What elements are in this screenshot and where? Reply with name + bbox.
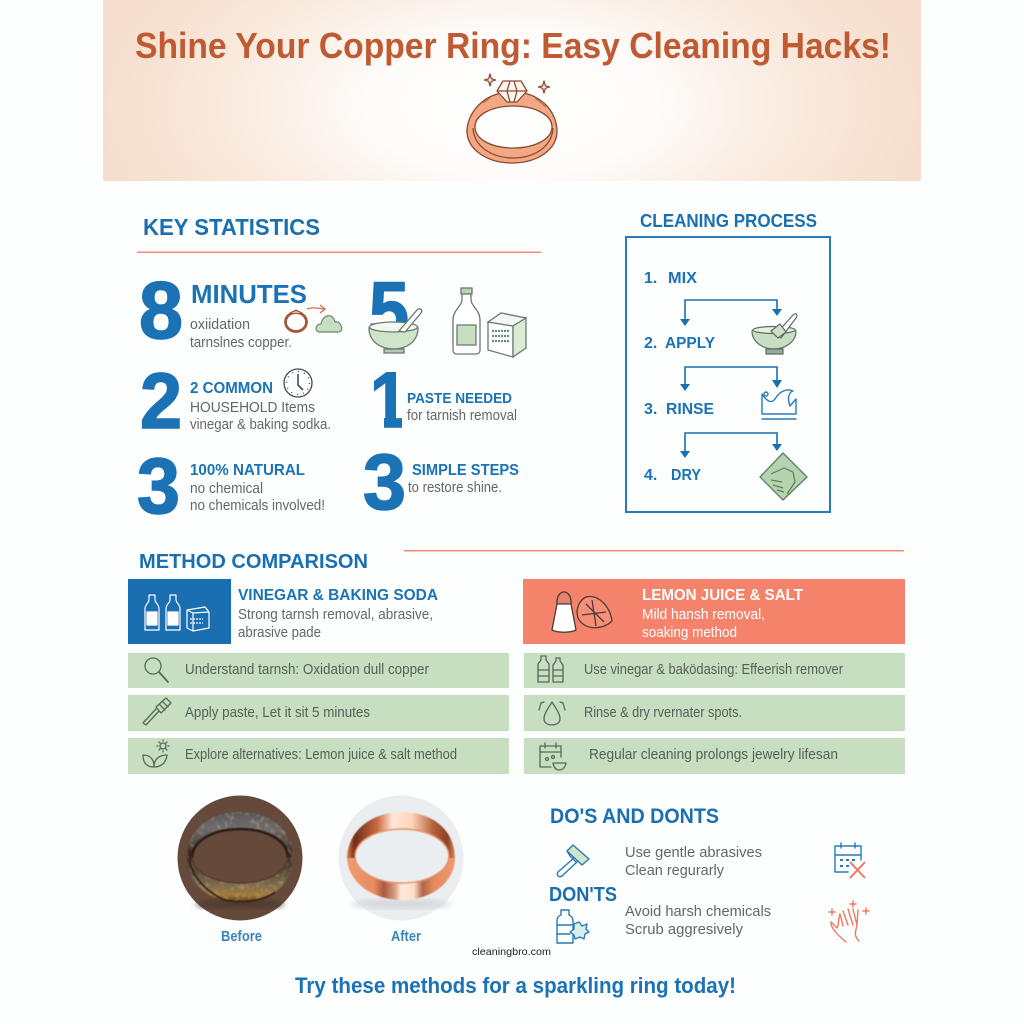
step 2 apply: 2. xyxy=(644,335,657,352)
row: explore alternatives xyxy=(128,738,509,774)
icon: clock xyxy=(284,369,312,397)
heading: don'ts: DON'TS xyxy=(549,884,617,906)
icon: roller brush xyxy=(557,845,589,877)
panel: do's and don'ts xyxy=(549,805,869,943)
stat: 8 minutes: tarnslnes copper. xyxy=(190,335,292,351)
icon: magnifier xyxy=(145,658,168,682)
row: understand tarnish xyxy=(128,653,509,688)
panel: lemon juice and salt: soaking method xyxy=(642,625,737,641)
label: before: Before xyxy=(221,929,262,945)
step 4 dry xyxy=(644,467,701,484)
stat: 3 simple steps: to restore shine. xyxy=(408,480,502,496)
step 3 rinse: 3. xyxy=(644,401,657,418)
icon: brush xyxy=(143,698,171,725)
panel: lemon juice and salt xyxy=(523,579,905,644)
icon: water wave xyxy=(762,390,796,419)
stat: 8 minutes: oxiidation xyxy=(190,317,250,333)
row: apply paste: Apply paste, Let it sit 5 minutes xyxy=(185,704,370,721)
stat: 2 common household items: 2 COMMON xyxy=(190,380,273,397)
step 1 mix: MIX xyxy=(668,270,697,287)
panel: header banner xyxy=(103,0,921,181)
row: rinse and dry xyxy=(524,695,905,731)
heading: do's and donts: DO'S AND DONTS xyxy=(550,805,719,828)
step 4 dry: DRY xyxy=(671,467,701,484)
stat: 8 minutes xyxy=(139,266,342,356)
panel: lemon juice and salt: LEMON JUICE & SALT xyxy=(642,587,803,604)
row: use vinegar xyxy=(524,653,905,688)
row: regular cleaning: Regular cleaning prolongs jewelry lifesan xyxy=(589,746,838,763)
panel: vinegar and baking soda: abrasive pade xyxy=(238,625,321,641)
heading: method comparison: METHOD COMPARISON xyxy=(139,550,368,573)
photo: shiny ring after xyxy=(338,796,464,920)
stat: 5 with bowl, bottle and box: 5 xyxy=(369,266,409,356)
icon: scrubbing hand with sparkles xyxy=(829,901,869,942)
arrows: rinse to dry xyxy=(680,433,782,458)
panel: vinegar and baking soda: Strong tarnsh removal, abrasive, xyxy=(238,607,433,623)
icon: ring to cloud xyxy=(286,305,342,332)
row: understand tarnish: Understand tarnsh: Oxidation dull copper xyxy=(185,661,429,678)
icon: calendar with cross xyxy=(835,843,865,878)
stat: 1 paste needed xyxy=(374,372,516,428)
icon: copper ring with gem xyxy=(467,74,557,163)
panel: vinegar and baking soda xyxy=(128,579,438,644)
stat: 2 common household items: 2 xyxy=(140,356,182,445)
icon: bottles and box xyxy=(145,595,209,631)
panel: key statistics xyxy=(138,280,528,515)
icon: vinegar bottle xyxy=(453,288,480,354)
icon: baking soda box xyxy=(488,313,526,357)
step 1 mix xyxy=(644,270,697,287)
panel: lemon juice and salt: Mild hansh removal, xyxy=(642,607,765,623)
stat: 3 simple steps: 3 xyxy=(363,437,406,526)
panel: cleaning process xyxy=(626,237,830,512)
watermark: cleaningbro.com: cleaningbro.com xyxy=(472,946,551,958)
text: do list: Use gentle abrasives xyxy=(625,844,762,861)
stat: 3 simple steps xyxy=(363,437,519,526)
icon: calendar with leaf xyxy=(540,743,566,770)
step 2 apply xyxy=(644,335,715,352)
step 4 dry: 4. xyxy=(644,467,657,484)
stat: 3 100% natural: no chemical xyxy=(190,481,263,497)
step 3 rinse xyxy=(644,401,714,418)
icon: mixing bowl xyxy=(369,309,422,353)
text: don't list: Scrub aggresively xyxy=(625,921,743,938)
row: explore alternatives: Explore alternatives: Lemon juice & salt method xyxy=(185,746,457,763)
panel: vinegar and baking soda: VINEGAR & BAKING SODA xyxy=(238,587,438,604)
row: rinse and dry: Rinse & dry rvernater spots. xyxy=(584,704,742,721)
text: do list: Clean regurarly xyxy=(625,862,724,879)
text: do list xyxy=(625,844,762,879)
icon: bowl and whisk xyxy=(752,314,797,354)
stat: 1 paste needed: for tarnish removal xyxy=(407,408,517,424)
row: regular cleaning xyxy=(524,738,905,774)
closing call to action: Try these methods for a sparkling ring today! xyxy=(295,973,736,998)
heading: key statistics: KEY STATISTICS xyxy=(143,214,320,240)
stat: 1 paste needed: 1 xyxy=(370,355,408,444)
icon: leaves and sun xyxy=(143,740,169,767)
step 3 rinse: RINSE xyxy=(666,401,714,418)
stat: 5 with bowl, bottle and box xyxy=(369,266,526,357)
arrows: mix to apply xyxy=(680,300,782,326)
icon: chemical bottle xyxy=(557,910,589,943)
step 1 mix: 1. xyxy=(644,270,657,287)
stat: 3 100% natural: no chemicals involved! xyxy=(190,498,325,514)
icon: two bottles xyxy=(538,656,563,682)
row: use vinegar: Use vinegar & baködasing: Effeerish remover xyxy=(584,661,843,678)
stat: 1 paste needed: PASTE NEEDED xyxy=(407,390,512,407)
stat: 3 simple steps: SIMPLE STEPS xyxy=(412,462,519,479)
heading: cleaning process: CLEANING PROCESS xyxy=(640,211,817,231)
icon: salt shaker and lemon xyxy=(552,592,612,632)
stat: 2 common household items: vinegar & baking sodka. xyxy=(190,417,331,433)
row: apply paste xyxy=(128,695,509,731)
label: after: After xyxy=(391,929,421,945)
photo: tarnished ring before xyxy=(178,796,302,920)
text: don't list: Avoid harsh chemicals xyxy=(625,903,771,920)
stat: 8 minutes: 8 xyxy=(139,266,183,356)
icon: water drop xyxy=(539,702,565,725)
icon: drying cloth xyxy=(760,453,807,500)
stat: 3 100% natural: 3 xyxy=(137,441,180,530)
arrows: apply to rinse xyxy=(680,367,782,391)
stat: 3 100% natural xyxy=(137,441,325,530)
stat: 8 minutes: MINUTES xyxy=(191,281,307,309)
text: don't list xyxy=(625,903,771,938)
stat: 2 common household items: HOUSEHOLD Items xyxy=(190,400,315,416)
stat: 3 100% natural: 100% NATURAL xyxy=(190,462,305,479)
step 2 apply: APPLY xyxy=(665,335,715,352)
title: Shine Your Copper Ring: Easy Cleaning Hacks! xyxy=(135,25,891,66)
stat: 2 common household items xyxy=(140,356,331,445)
